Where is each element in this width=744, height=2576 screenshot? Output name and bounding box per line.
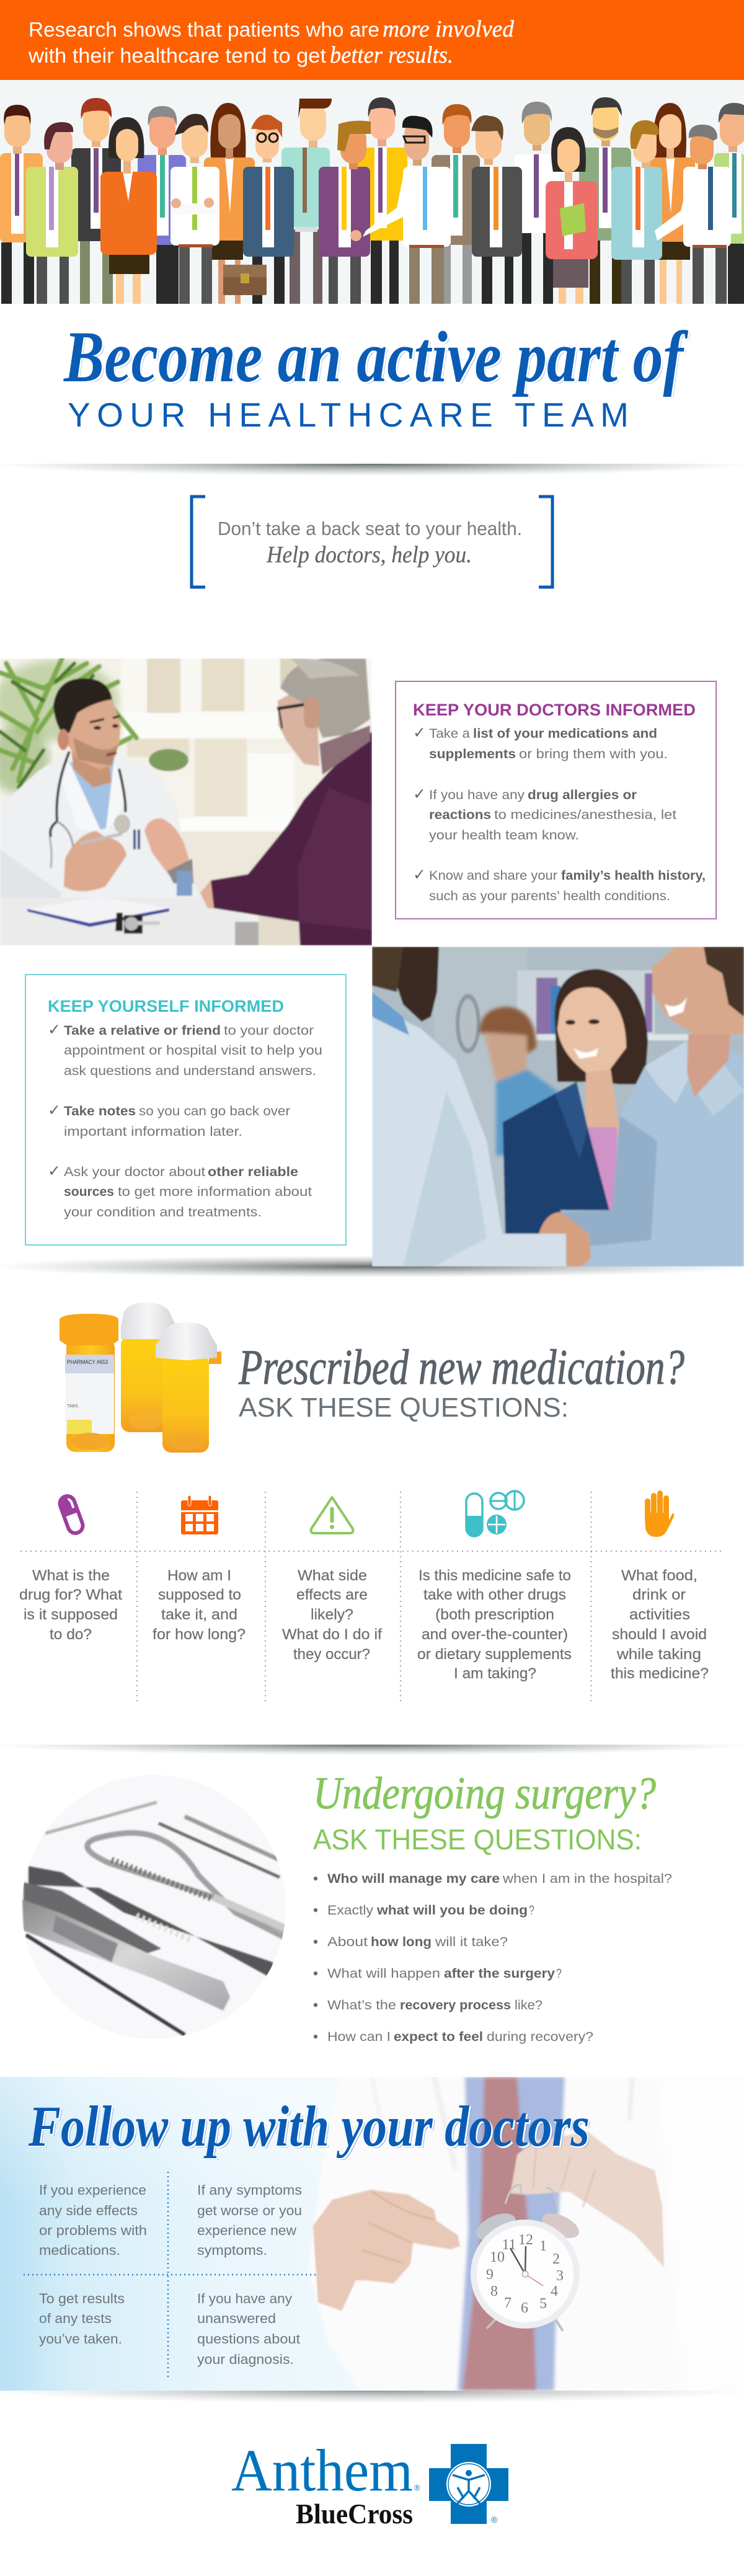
orange header banner: [0, 0, 744, 80]
panel: keep your doctors informed: [396, 681, 716, 919]
photo: handshake with doctor and couple: [372, 947, 744, 1267]
person 16: woman with folder: [546, 127, 598, 304]
question 4: or dietary supplements: [417, 1646, 572, 1663]
title subtitle: YOUR HEALTHCARE TEAM: [68, 396, 629, 434]
question 2: How am I: [167, 1567, 231, 1584]
question: recovery process: What’s the: [327, 1998, 396, 2012]
follow up title: Follow up with your doctors: [30, 2097, 591, 2161]
alarm clock: 7: [504, 2295, 512, 2311]
question 2: take it, and: [161, 1606, 237, 1623]
question: how long: [314, 1935, 508, 1949]
check list: appointment or hospital visit to help you: [64, 1043, 322, 1058]
alarm clock: 8: [490, 2283, 498, 2299]
question: what will you be doing: what will you be doing: [376, 1903, 528, 1918]
heading: KEEP YOURSELF INFORMED: [48, 997, 284, 1016]
question: recovery process: [314, 1998, 542, 2012]
question: expect to feel: How can I: [327, 2030, 391, 2044]
reason: test results: you’ve taken.: [39, 2331, 122, 2347]
person 5: [138, 106, 186, 304]
question 5: while taking: [616, 1646, 701, 1663]
check list: or bring them with you.: [519, 747, 668, 761]
banner text: [28, 16, 515, 68]
reason: unanswered questions: your diagnosis.: [197, 2352, 294, 2367]
question: how long: About: [327, 1935, 368, 1949]
check list: to medicines/anesthesia, let: [494, 808, 676, 822]
question: expect to feel: expect to feel: [394, 2030, 483, 2044]
question 5: [611, 1567, 709, 1682]
person 21: [714, 103, 744, 304]
callout: back seat quote with brackets: Don’t take a back seat to your health.: [218, 518, 522, 539]
panel: follow up with your doctors: [0, 2077, 744, 2391]
alarm clock: 2: [552, 2251, 560, 2267]
person 3: [71, 98, 121, 304]
photo: surgical instruments in circle: [22, 1799, 285, 2036]
check list: Take a relative or friend: [64, 1024, 221, 1038]
check list: [48, 1020, 322, 1219]
check list: to your doctor: [224, 1024, 314, 1038]
check list: Know and share your: [429, 869, 557, 883]
reason: side effects: any side effects: [39, 2203, 138, 2218]
banner text: better results.: [330, 42, 453, 68]
reason: unanswered questions: [197, 2291, 300, 2367]
logo: Anthem BlueCross: [231, 2437, 508, 2530]
question: after the surgery: ?: [556, 1967, 562, 1981]
left bottle with label: PHARMACY #653: [67, 1359, 108, 1365]
person 6: arms crossed: [170, 114, 219, 304]
alarm clock: 5: [539, 2296, 547, 2312]
question 4: and over-the-counter): [422, 1626, 568, 1643]
alarm clock: 6: [521, 2300, 528, 2316]
person 20: [655, 125, 731, 304]
question: what will you be doing: Exactly: [327, 1903, 374, 1918]
question 3: likely?: [311, 1606, 353, 1623]
follow up title: Follow up with your doctors: [28, 2095, 590, 2159]
check list: important information later.: [64, 1125, 242, 1139]
icon: assorted pills: [466, 1491, 524, 1536]
person 10: [319, 121, 371, 304]
question 3: effects are: [296, 1587, 368, 1603]
person 1: [0, 105, 43, 304]
alarm clock: 1: [539, 2238, 547, 2254]
reason: side effects: medications.: [39, 2242, 120, 2258]
question 2: supposed to: [158, 1587, 241, 1603]
check list: family’s health history,: [561, 869, 706, 883]
reason: symptoms: get worse or you: [197, 2203, 302, 2218]
question: who will manage: when I am in the hospital?: [502, 1872, 672, 1886]
briefcase: [223, 265, 267, 295]
question 2: for how long?: [153, 1626, 246, 1643]
heading: KEEP YOUR DOCTORS INFORMED: [413, 701, 696, 719]
person 2: [26, 122, 78, 304]
reason: unanswered questions: If you have any: [197, 2291, 292, 2306]
reason: symptoms: If any symptoms: [197, 2182, 302, 2198]
check list: [413, 724, 706, 903]
question: after the surgery: [314, 1967, 562, 1981]
callout: back seat quote with brackets: [192, 497, 552, 587]
logo: Anthem BlueCross: BlueCross: [296, 2498, 413, 2530]
question 5: drink or: [632, 1587, 686, 1603]
check list: your condition and treatments.: [64, 1205, 262, 1219]
check list: so you can go back over: [139, 1104, 290, 1118]
heading: prescribed new medication: [238, 1340, 684, 1423]
check list: reactions: [429, 808, 491, 822]
question 1: drug for? What: [19, 1587, 122, 1603]
question: what will you be doing: [314, 1903, 534, 1918]
person 12: shaking hands, glasses: [350, 116, 451, 304]
check list: ask questions and understand answers.: [64, 1064, 316, 1078]
icon: calendar: [181, 1495, 218, 1534]
reason: side effects: or problems with: [39, 2223, 147, 2238]
left bottle with label: TABS.: [67, 1404, 79, 1409]
pill bottles photo: [60, 1303, 221, 1453]
right bottle: [156, 1322, 221, 1453]
surgery heading: [313, 1768, 656, 1856]
check list: other reliable: [208, 1165, 298, 1179]
question: recovery process: like?: [515, 1998, 542, 2012]
check list: drug allergies or: [528, 788, 637, 802]
reason: unanswered questions: unanswered: [197, 2311, 276, 2326]
question: after the surgery: What will happen: [327, 1967, 440, 1981]
person 9: [281, 99, 332, 304]
heading: prescribed new medication: ASK THESE QUESTIONS:: [239, 1392, 569, 1423]
reason: side effects: [39, 2182, 147, 2258]
alarm clock: 11: [502, 2237, 516, 2253]
reason: symptoms: symptoms.: [197, 2242, 267, 2258]
question: expect to feel: [314, 2030, 593, 2044]
question 3: What do I do if: [282, 1626, 382, 1643]
reason: unanswered questions: questions about: [197, 2331, 300, 2347]
callout: back seat quote with brackets: Help doctors, help you.: [266, 542, 472, 568]
check list: ✓: [413, 865, 426, 883]
alarm clock: 9: [486, 2267, 494, 2283]
reason: test results: To get results: [39, 2291, 125, 2306]
surgery question list: [314, 1872, 672, 2044]
check list: ✓: [413, 724, 426, 741]
check list: ✓: [413, 785, 426, 803]
logo: Anthem BlueCross: ®: [414, 2483, 420, 2492]
person 8: with glasses: [243, 115, 294, 304]
check list: ✓: [48, 1162, 61, 1180]
check list: to get more information about: [118, 1185, 312, 1199]
blue cross symbol: [429, 2444, 508, 2525]
middle bottle: [121, 1303, 177, 1432]
check list: sources: [64, 1185, 114, 1199]
question 4: take with other drugs: [423, 1587, 566, 1603]
question 5: activities: [629, 1606, 690, 1623]
question 3: What side: [298, 1567, 367, 1584]
question: expect to feel: during recovery?: [487, 2030, 593, 2044]
question 5: What food,: [621, 1567, 698, 1584]
question 3: they occur?: [293, 1646, 370, 1663]
illustration: row of healthcare team people: [0, 81, 744, 304]
question: recovery process: recovery process: [400, 1998, 511, 2012]
banner text: Research shows that patients who are: [29, 18, 379, 41]
question 3: [282, 1567, 382, 1663]
reason: test results: of any tests: [39, 2311, 112, 2326]
check list: list of your medications and: [473, 727, 657, 741]
person 19: woman with long hair: [645, 103, 695, 304]
question 5: this medicine?: [611, 1665, 709, 1682]
question: who will manage: Who will manage my care: [327, 1872, 500, 1886]
question 1: to do?: [50, 1626, 92, 1643]
check list: your health team know.: [429, 828, 579, 843]
person 13: [432, 104, 480, 304]
blue cross symbol: ®: [491, 2515, 498, 2525]
person 7: woman with long hair: [204, 103, 255, 304]
question 4: I am taking?: [454, 1665, 536, 1682]
question 4: [417, 1567, 572, 1682]
surgery heading: ASK THESE QUESTIONS:: [313, 1823, 642, 1856]
question 1: [19, 1567, 122, 1643]
person 11: [356, 97, 407, 304]
banner text: more involved: [383, 16, 515, 42]
panel background photo: doctor with alarm clock: [0, 2077, 744, 2391]
question: how long: will it take?: [435, 1935, 508, 1949]
logo: Anthem BlueCross: Anthem: [231, 2437, 413, 2503]
alarm clock: 10: [490, 2249, 505, 2265]
check list: Take notes: [64, 1104, 136, 1118]
icon: stop hand: [645, 1490, 674, 1537]
title: [63, 316, 691, 434]
alarm clock: 12: [518, 2232, 533, 2248]
reason: test results: [39, 2291, 125, 2347]
check list: If you have any: [429, 788, 525, 802]
reason: side effects: If you experience: [39, 2182, 146, 2198]
surgery heading: Undergoing surgery?: [313, 1768, 656, 1819]
question 4: Is this medicine safe to: [418, 1567, 571, 1584]
check list: ✓: [48, 1020, 61, 1038]
icon: purple pill: [55, 1492, 87, 1538]
check list: such as your parents’ health conditions.: [429, 889, 670, 903]
question 5: should I avoid: [612, 1626, 707, 1643]
photo: doctor talking to patient: [0, 658, 372, 945]
follow up title: Follow up with your doctors: [29, 2096, 591, 2160]
left bottle with label: [60, 1314, 118, 1452]
question 2: [153, 1567, 246, 1643]
person 18: [611, 120, 662, 304]
question 4: (both prescription: [435, 1606, 554, 1623]
panel: keep yourself informed: [25, 975, 346, 1245]
check list: supplements: [429, 747, 516, 761]
question: who will manage: [314, 1872, 672, 1886]
alarm clock: 4: [551, 2283, 558, 2299]
question 1: is it supposed: [24, 1606, 118, 1623]
person 14: [471, 115, 522, 304]
question: after the surgery: after the surgery: [444, 1967, 555, 1981]
banner text: with their healthcare tend to get: [28, 44, 326, 67]
alarm clock: [471, 2185, 583, 2331]
alarm clock: 3: [556, 2268, 564, 2284]
reason: symptoms: experience new: [197, 2223, 296, 2238]
check list: Take a: [429, 727, 470, 741]
person 4: woman in orange jacket: [100, 117, 157, 304]
reason: symptoms: [197, 2182, 302, 2258]
icon: warning triangle: [311, 1497, 353, 1533]
dotted cross lines: [24, 2172, 318, 2377]
check list: ✓: [48, 1101, 61, 1119]
question: what will you be doing: ?: [529, 1903, 534, 1918]
check list: Ask your doctor about: [64, 1165, 205, 1179]
dotted grid lines: [20, 1492, 724, 1702]
question: how long: how long: [371, 1935, 432, 1949]
person 17: [579, 97, 631, 304]
question columns: [19, 1567, 709, 1682]
person 15: [515, 102, 560, 304]
question 1: What is the: [32, 1567, 110, 1584]
